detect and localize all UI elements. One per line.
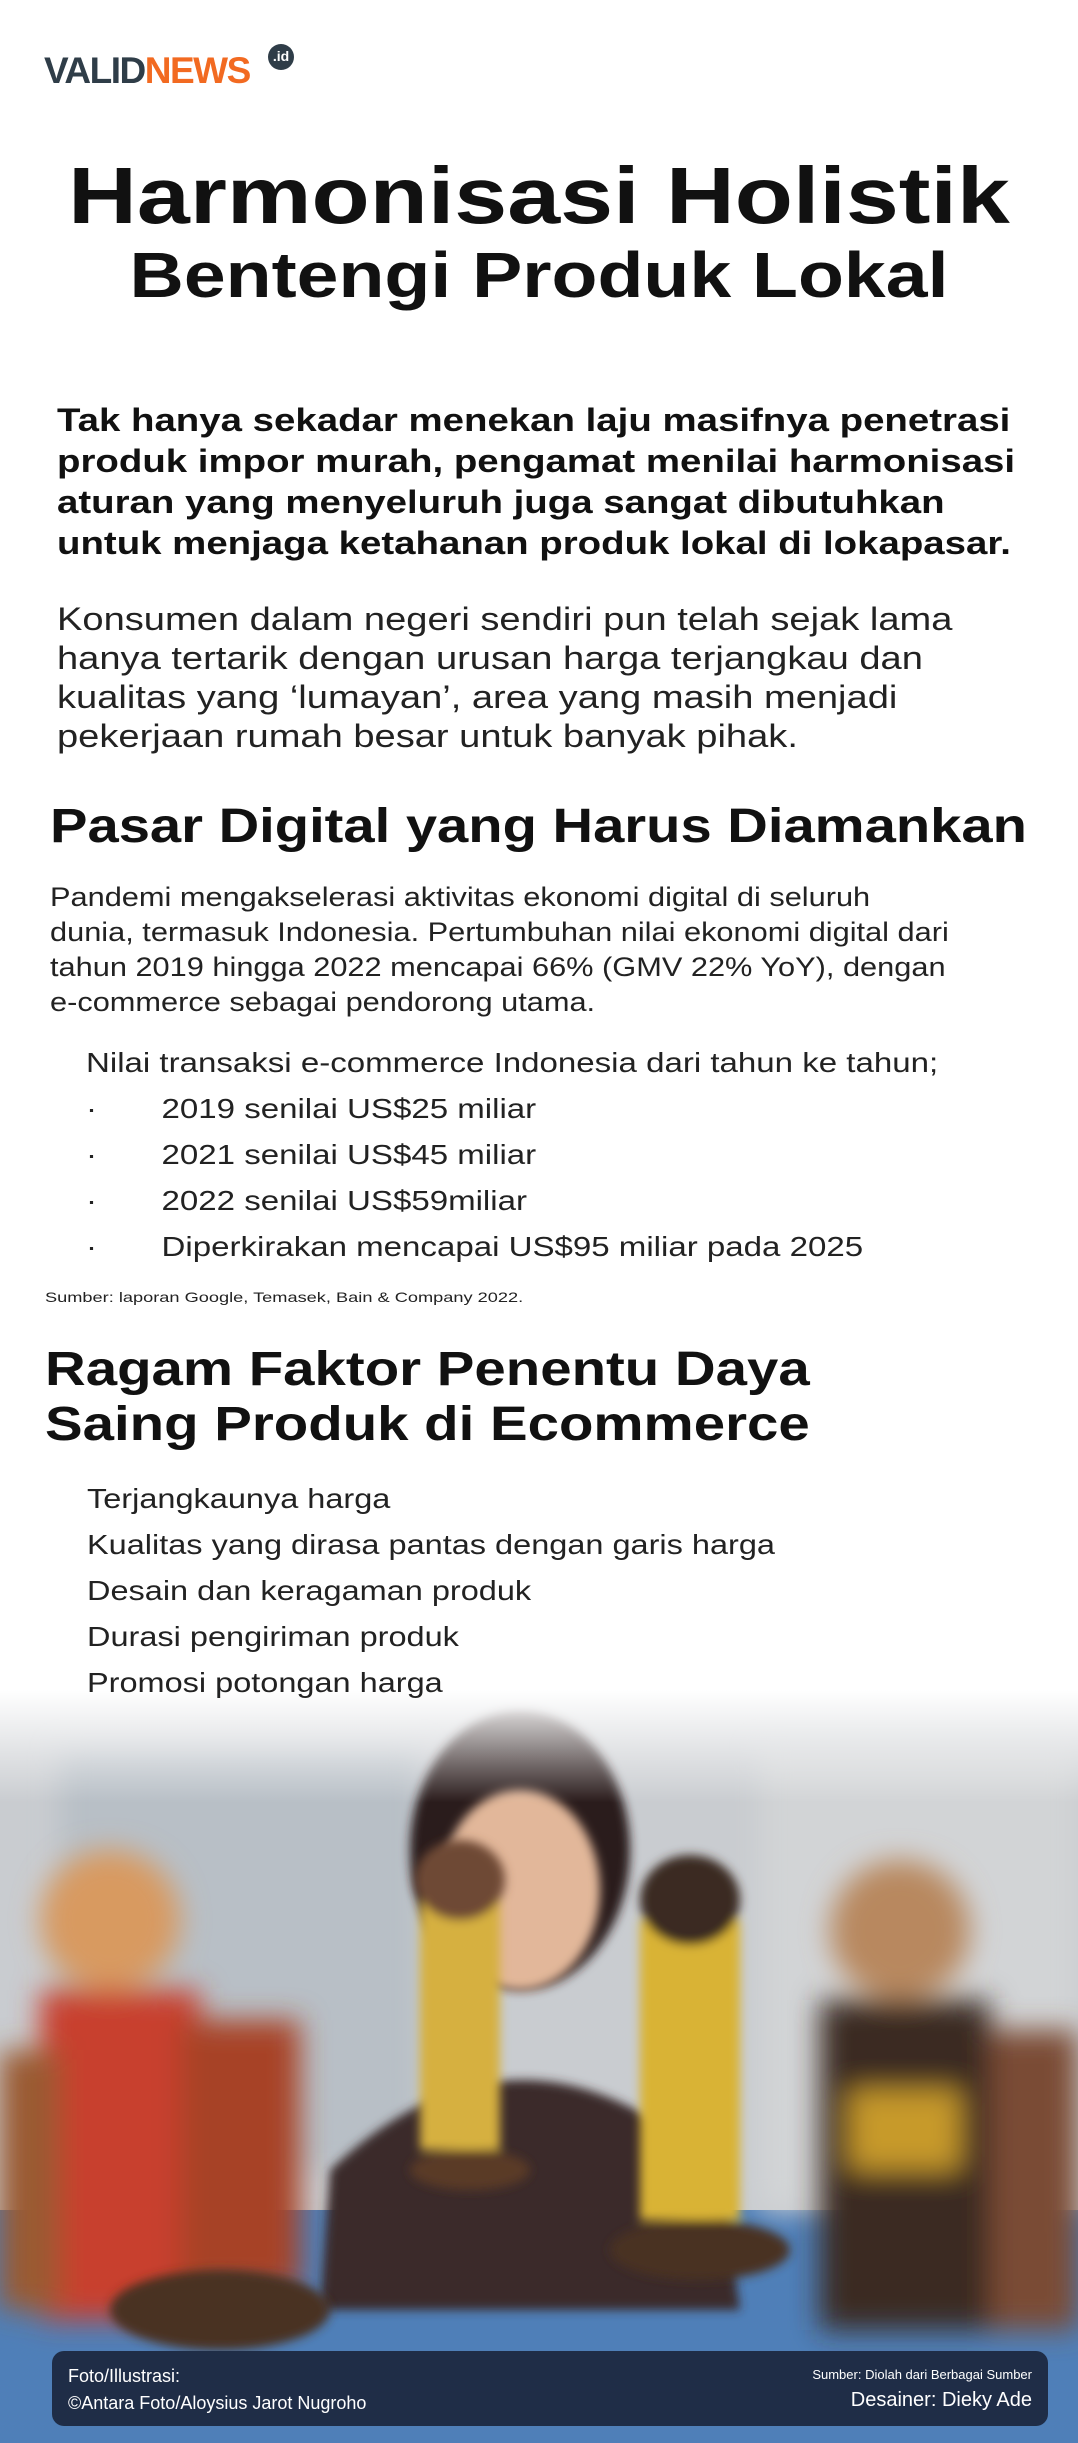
intro bold text: Tak hanya sekadar menekan laju masifnya penetrasi xyxy=(57,402,1010,438)
photo credit: ©Antara Foto/Aloysius Jarot Nugroho xyxy=(68,2393,366,2413)
list: faktor: Promosi potongan harga xyxy=(87,1667,443,1698)
source and designer xyxy=(812,2367,1032,2411)
intro text: Konsumen dalam negeri sendiri pun telah sejak lama xyxy=(57,601,952,637)
list: faktor xyxy=(87,1483,775,1698)
list: faktor: Kualitas yang dirasa pantas dengan garis harga xyxy=(87,1529,775,1560)
intro text: hanya tertarik dengan urusan harga terjangkau dan xyxy=(57,640,923,676)
title xyxy=(68,151,1010,311)
photo credit: Foto/Illustrasi: xyxy=(68,2366,180,2386)
list: transaksi xyxy=(86,1047,938,1262)
title: Bentengi Produk Lokal xyxy=(130,239,948,311)
heading: ragam faktor: Ragam Faktor Penentu Daya xyxy=(45,1343,810,1396)
paragraph: pandemi xyxy=(50,882,949,1017)
list: faktor: Desain dan keragaman produk xyxy=(87,1575,531,1606)
list: faktor: Durasi pengiriman produk xyxy=(87,1621,459,1652)
intro text xyxy=(57,601,952,754)
title: Harmonisasi Holistik xyxy=(68,151,1010,240)
paragraph: pandemi: tahun 2019 hingga 2022 mencapai 66% (GMV 22% YoY), dengan xyxy=(50,952,946,982)
heading: ragam faktor xyxy=(45,1343,810,1451)
heading: pasar digital: Pasar Digital yang Harus Diamankan xyxy=(50,800,1027,853)
photo credit xyxy=(68,2366,366,2413)
intro bold text: untuk menjaga ketahanan produk lokal di lokapasar. xyxy=(57,525,1011,561)
paragraph: pandemi: dunia, termasuk Indonesia. Pertumbuhan nilai ekonomi digital dari xyxy=(50,917,949,947)
woman xyxy=(410,1710,630,1990)
list: faktor: Terjangkaunya harga xyxy=(87,1483,390,1514)
photo background xyxy=(0,1703,1078,2443)
intro bold text xyxy=(57,402,1015,561)
logo: .id xyxy=(273,48,289,64)
figures xyxy=(0,1850,1078,2330)
intro bold text: produk impor murah, pengamat menilai harmonisasi xyxy=(57,443,1015,479)
list: transaksi: 2019 senilai US$25 miliar xyxy=(162,1093,536,1124)
intro text: pekerjaan rumah besar untuk banyak pihak. xyxy=(57,718,798,754)
list: transaksi: · xyxy=(86,1185,97,1216)
list: transaksi: Nilai transaksi e-commerce Indonesia dari tahun ke tahun; xyxy=(86,1047,938,1078)
intro text: kualitas yang ‘lumayan’, area yang masih menjadi xyxy=(57,679,897,715)
footer bar xyxy=(52,2351,1048,2426)
heading: ragam faktor: Saing Produk di Ecommerce xyxy=(45,1398,810,1451)
list: transaksi: 2021 senilai US$45 miliar xyxy=(162,1139,536,1170)
list: transaksi: · xyxy=(86,1231,97,1262)
source and designer: Desainer: Dieky Ade xyxy=(851,2389,1032,2411)
list: transaksi: 2022 senilai US$59miliar xyxy=(162,1185,527,1216)
list: transaksi: Diperkirakan mencapai US$95 miliar pada 2025 xyxy=(162,1231,863,1262)
logo: VALIDNEWS xyxy=(44,50,250,91)
source and designer: Sumber: Diolah dari Berbagai Sumber xyxy=(812,2367,1032,2382)
list: transaksi: · xyxy=(86,1139,97,1170)
intro bold text: aturan yang menyeluruh juga sangat dibutuhkan xyxy=(57,484,945,520)
paragraph: pandemi: e-commerce sebagai pendorong utama. xyxy=(50,987,595,1017)
list: transaksi: · xyxy=(86,1093,97,1124)
source: Sumber: laporan Google, Temasek, Bain & Company 2022. xyxy=(45,1289,523,1305)
paragraph: pandemi: Pandemi mengakselerasi aktivitas ekonomi digital di seluruh xyxy=(50,882,870,912)
